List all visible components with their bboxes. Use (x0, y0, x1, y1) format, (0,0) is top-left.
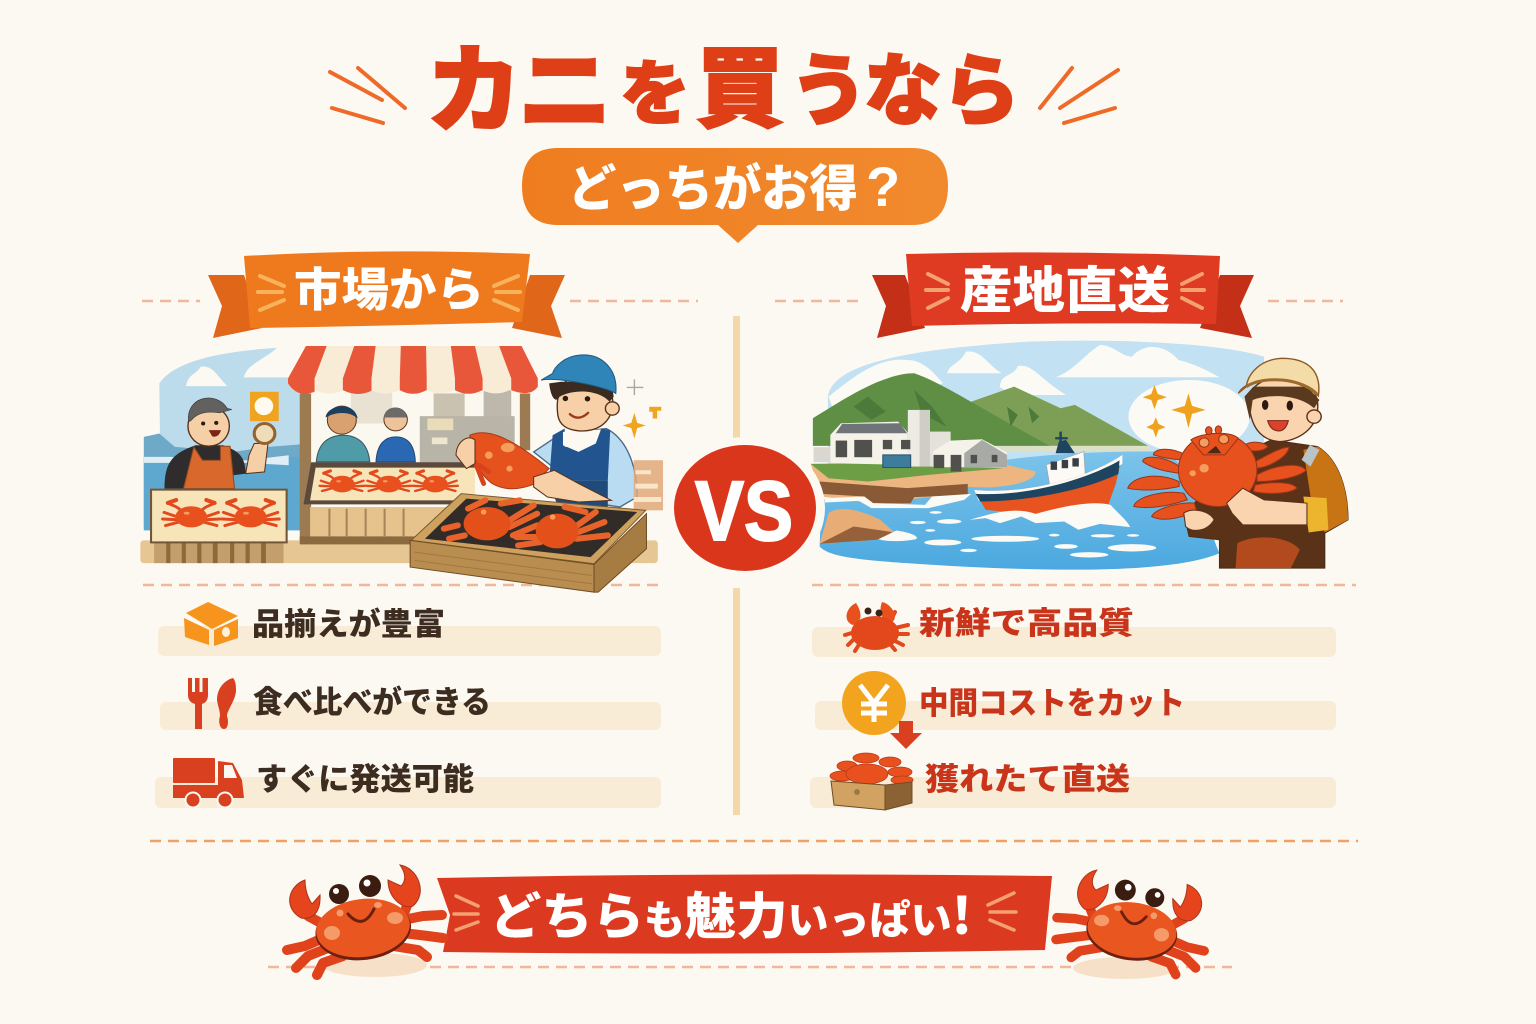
icon: box (184, 602, 238, 646)
row: 品揃えが豊富: 品揃えが豊富 (252, 599, 445, 644)
buildings (814, 447, 831, 462)
row: 新鮮で高品質 (812, 598, 1336, 657)
row: 品揃えが豊富 (158, 599, 661, 656)
row: すぐに発送可能: すぐに発送可能 (256, 754, 474, 799)
title: カニを買うなら: を (620, 38, 690, 139)
title burst lines right (1040, 68, 1118, 123)
left heading ribbon: 市場から (208, 251, 565, 338)
left vendor (164, 445, 246, 489)
title burst lines left (330, 68, 405, 123)
crate of crabs (411, 494, 646, 564)
right benefits list (810, 598, 1336, 810)
icon: crate of crabs (830, 753, 913, 810)
subtitle speech bubble: どっちがお得 (568, 149, 858, 221)
right heading ribbon: 産地直送 (872, 251, 1254, 338)
boat (1046, 452, 1086, 487)
background of stall (306, 390, 527, 467)
title: カニを買うなら: ら (942, 29, 1020, 141)
VS badge (665, 437, 825, 579)
row: すぐに発送可能 (155, 754, 661, 808)
market illustration (140, 346, 663, 592)
title: カニを買うなら: な (864, 29, 942, 141)
held big crab (1128, 433, 1306, 519)
icon: yen coin (842, 671, 906, 735)
row: 中間コストをカット (815, 671, 1336, 749)
crab mascot left (287, 865, 443, 977)
awning (288, 346, 538, 393)
arrow down (890, 721, 922, 749)
row: 獲れたて直送 (810, 753, 1336, 810)
posts (300, 393, 311, 544)
dashed accents beside headings (142, 301, 1358, 967)
counter with crabs (310, 507, 455, 537)
title: カニを買うなら: ニ (518, 16, 612, 152)
row: 新鮮で高品質: 新鮮で高品質 (919, 598, 1134, 643)
bottom banner: どちらも魅力いっぱい!: どちらも魅力いっぱい! (490, 877, 972, 949)
sparkles (623, 413, 646, 439)
sea and hills (144, 434, 302, 527)
shore (811, 463, 1036, 503)
icon: truck (173, 758, 244, 808)
VS badge: VS (695, 464, 793, 558)
left benefits list (155, 599, 661, 808)
sea (820, 452, 1219, 570)
ground (140, 540, 658, 563)
row: 食べ比べができる: 食べ比べができる (253, 677, 491, 722)
sparkles (1143, 385, 1206, 438)
wake (970, 503, 1130, 530)
vertical divider (733, 316, 740, 815)
coastal illustration (811, 341, 1348, 570)
title: カニを買うなら (426, 13, 1020, 152)
title: カニを買うなら: う (790, 29, 868, 141)
sky (828, 341, 1264, 467)
back customers (316, 435, 370, 462)
row: 獲れたて直送: 獲れたて直送 (925, 754, 1130, 799)
held crab (470, 433, 549, 489)
left stall sign (154, 540, 284, 563)
icon: fork and spoon (188, 678, 236, 729)
sky (159, 347, 309, 527)
row: 中間コストをカット: 中間コストをカット (919, 678, 1185, 723)
crab mascot right (1056, 870, 1204, 979)
title: カニを買うなら: 買 (696, 19, 784, 146)
right vendor (534, 429, 637, 507)
rock (820, 509, 895, 544)
icon: crab (845, 602, 908, 651)
subtitle speech bubble (522, 148, 948, 243)
mountains (971, 387, 1148, 446)
subtitle speech bubble: ? (866, 155, 900, 218)
left heading ribbon: 市場から: 市場から (294, 254, 484, 320)
fisherman (1184, 440, 1348, 568)
title: カニを買うなら: カ (426, 13, 522, 152)
hands (1227, 488, 1307, 525)
right heading ribbon: 産地直送: 産地直送 (960, 251, 1170, 323)
row: 食べ比べができる (160, 677, 661, 730)
